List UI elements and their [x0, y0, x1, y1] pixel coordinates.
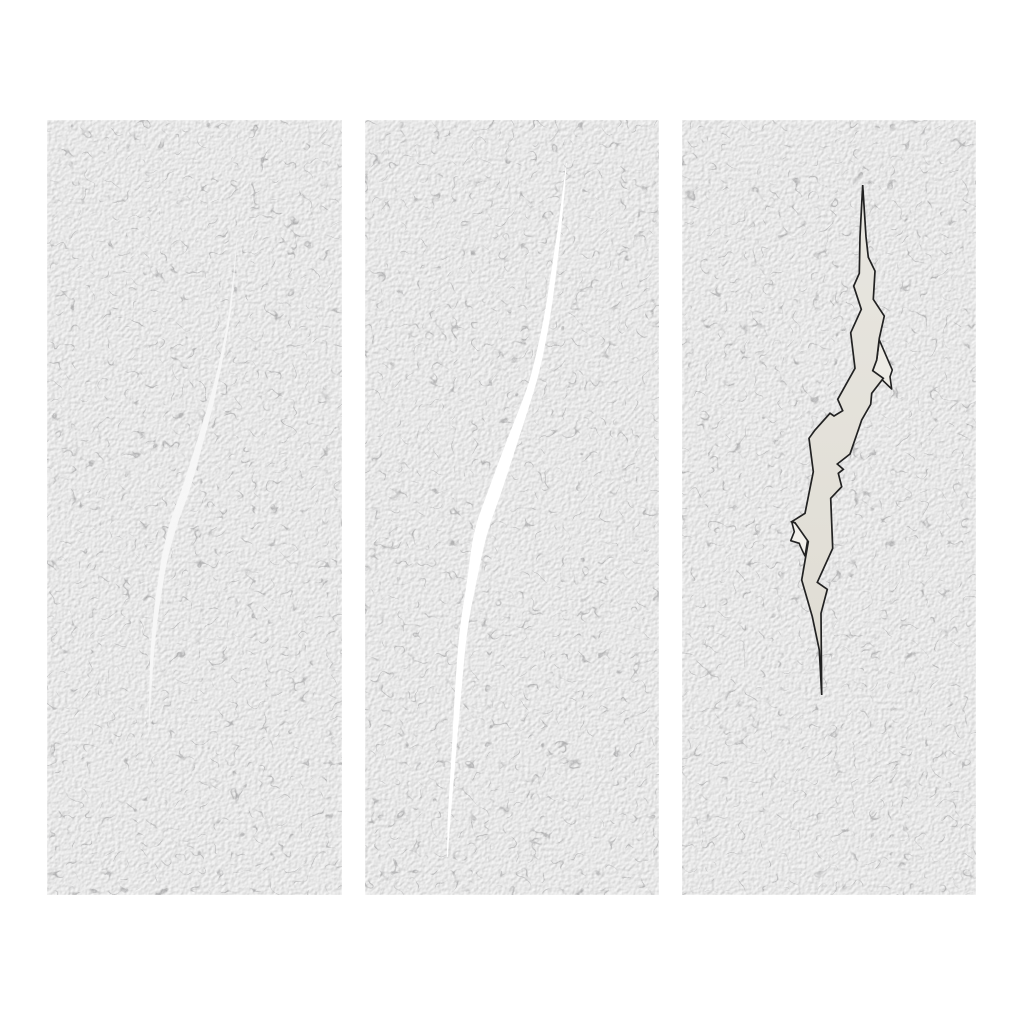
- panel 3 plaster surface: [682, 120, 976, 895]
- right flaking chip: [873, 340, 892, 389]
- panel 3 surface marks: [682, 120, 976, 895]
- panel 1 plaster surface: [47, 120, 342, 895]
- panel 2 plaster surface: [365, 120, 659, 895]
- left flaking chip: [791, 522, 808, 556]
- panel 2 surface marks: [365, 120, 659, 895]
- hairline crack shape: [149, 240, 237, 735]
- panel 1 surface marks: [47, 120, 342, 895]
- panel: hairline crack: [47, 120, 342, 895]
- panel: open jagged crack: [682, 120, 976, 895]
- jagged crack opening: [792, 185, 884, 695]
- panel: widening crack: [365, 120, 659, 895]
- white widening crack shape: [447, 163, 566, 857]
